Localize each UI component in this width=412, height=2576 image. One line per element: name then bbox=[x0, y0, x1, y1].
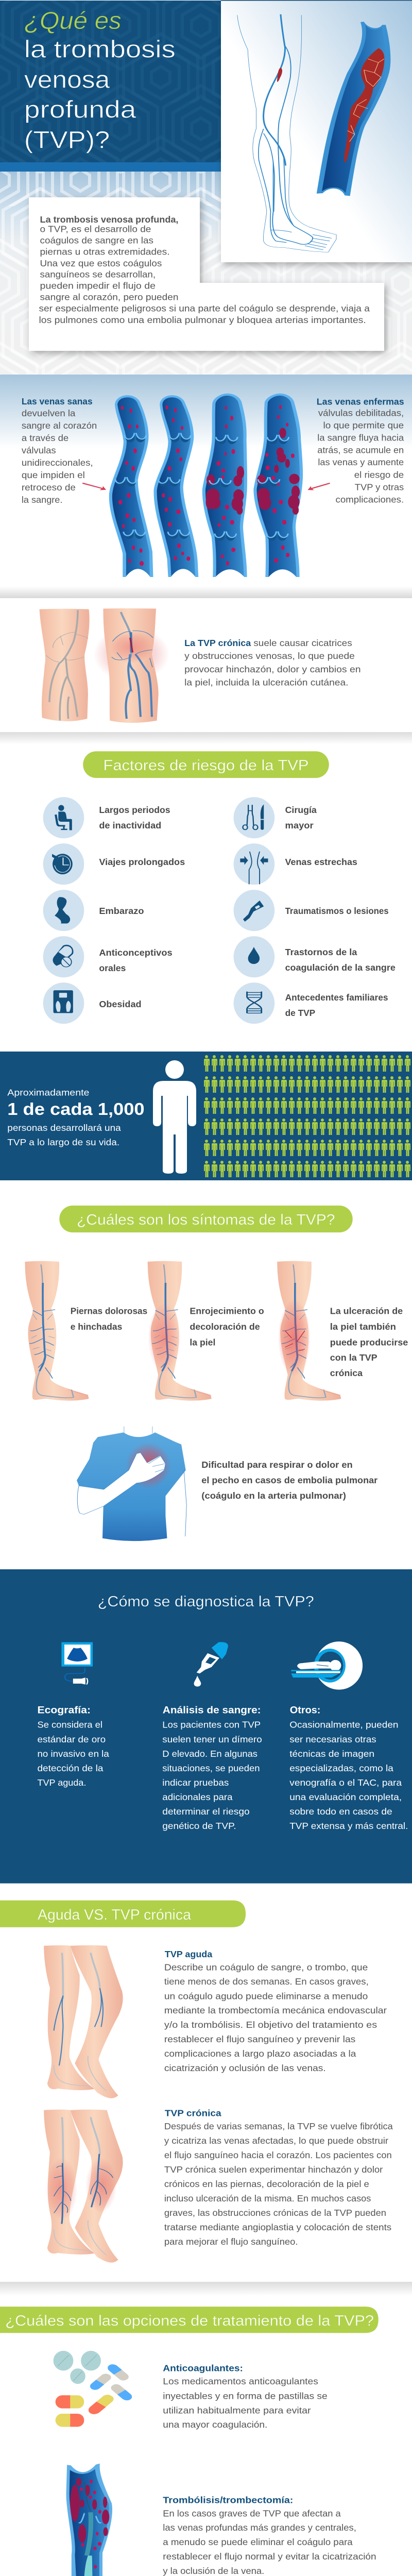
statistic text: TVP a lo largo de su vida. bbox=[7, 1137, 119, 1147]
illustration: person holding chest bbox=[77, 1427, 186, 1541]
risk: narrow veins: Venas estrechas bbox=[285, 857, 357, 867]
panel: chest pain bbox=[77, 1427, 378, 1541]
risk: inactivity: de inactividad bbox=[99, 820, 161, 831]
text: blood test: Análisis de sangre: bbox=[163, 1705, 261, 1716]
text: other imaging: Otros: bbox=[290, 1705, 320, 1716]
text: ultrasound bbox=[37, 1705, 109, 1788]
text: healthy veins bbox=[22, 396, 97, 505]
text: ultrasound: Ecografía: bbox=[37, 1705, 91, 1716]
intro paragraph: coágulos de sangre en las bbox=[40, 235, 153, 246]
text: anticoagulants: una mayor coagulación. bbox=[163, 2419, 267, 2430]
text: ultrasound: no invasivo en la bbox=[37, 1749, 109, 1759]
diseased vein 2 bbox=[253, 394, 303, 577]
text: chronic DVT detail: TVP crónica bbox=[165, 2108, 221, 2119]
treatment divider bbox=[0, 2282, 412, 2296]
text: healthy veins: válvulas bbox=[22, 445, 56, 455]
illustration: knee with chronic DVT bbox=[93, 608, 169, 723]
icon: ultrasound bbox=[61, 1642, 93, 1685]
intro paragraph bbox=[39, 214, 370, 325]
text: healthy veins: devuelven la bbox=[22, 408, 76, 418]
leg line drawing bbox=[237, 14, 336, 252]
risk: surgery: mayor bbox=[285, 820, 314, 831]
risk: inactivity: Largos periodos bbox=[99, 805, 170, 815]
text: healthy veins: a través de bbox=[22, 433, 68, 443]
risk: oral contraceptives: orales bbox=[99, 963, 126, 973]
leg 1: painful swollen: Piernas dolorosas bbox=[71, 1306, 147, 1316]
hero background pattern bbox=[0, 172, 412, 375]
text: blood test bbox=[162, 1705, 262, 1831]
pictogram: crowd of people bbox=[203, 1055, 412, 1180]
risk: clotting disorders bbox=[234, 936, 396, 977]
panel: treatment options bbox=[0, 2307, 379, 2576]
diagnosis content bbox=[37, 1594, 408, 1831]
text: anticoagulants bbox=[163, 2363, 328, 2430]
arrow: to diseased vein bbox=[307, 483, 330, 490]
text: blood test: suelen tener un dímero bbox=[162, 1734, 262, 1744]
text: blood test: determinar el riesgo bbox=[162, 1806, 250, 1817]
heading: diagnosis: ¿Cómo se diagnostica la TVP? bbox=[98, 1594, 314, 1609]
intro paragraph: Una vez que estos coágulos bbox=[40, 258, 162, 268]
risk: clotting disorders: Trastornos de la bbox=[285, 947, 357, 957]
heading: risk factors: Factores de riesgo de la TVP bbox=[104, 757, 308, 773]
text: blood test: D elevado. En algunas bbox=[162, 1749, 258, 1759]
header panel bbox=[0, 1, 221, 172]
leg 2: redness: la piel bbox=[190, 1337, 215, 1347]
leg 2: redness: decoloración de bbox=[190, 1321, 260, 1332]
intro paragraph: La trombosis venosa profunda, bbox=[40, 214, 178, 225]
text: anticoagulants: Anticoagulantes: bbox=[163, 2363, 243, 2374]
text: blood test: Los pacientes con TVP bbox=[162, 1719, 261, 1730]
text: other imaging: ser necesarias otras bbox=[289, 1734, 376, 1744]
text: chest pain: Dificultad para respirar o dolor en bbox=[201, 1460, 353, 1470]
text: anticoagulants: utilizan habitualmente para evitar bbox=[163, 2405, 311, 2415]
leg 1: painful swollen bbox=[25, 1261, 147, 1401]
text: healthy veins: Las venas sanas bbox=[22, 396, 93, 406]
risk: oral contraceptives: Anticonceptivos bbox=[99, 947, 173, 958]
risk: family history bbox=[234, 982, 388, 1024]
title: (TVP)? bbox=[24, 126, 110, 154]
title: la trombosis bbox=[24, 36, 176, 63]
text: blood test: genético de TVP. bbox=[162, 1821, 236, 1831]
text: healthy veins: retroceso de bbox=[22, 482, 76, 493]
text: healthy veins: la sangre. bbox=[22, 495, 62, 505]
leg 3: ulceration: crónica bbox=[330, 1368, 363, 1378]
text: other imaging bbox=[289, 1705, 408, 1831]
text: chronic DVT: La TVP crónica bbox=[184, 638, 251, 648]
illustration: legs with chronic DVT bbox=[44, 2110, 123, 2263]
text: other imaging: técnicas de imagen bbox=[289, 1749, 374, 1759]
text: chest pain bbox=[201, 1460, 378, 1501]
text: blood test: adicionales para bbox=[162, 1792, 233, 1802]
illustration: legs with acute DVT bbox=[44, 1945, 123, 2098]
risk: oral contraceptives bbox=[43, 936, 173, 977]
text: thrombolysis bbox=[163, 2495, 376, 2576]
healthy vein 1 bbox=[109, 395, 153, 577]
text: chronic DVT bbox=[184, 638, 361, 688]
leg 3: ulceration: con la TVP bbox=[330, 1352, 377, 1363]
illustration: catheter in vein bbox=[66, 2464, 112, 2576]
leg 3: ulceration bbox=[277, 1261, 408, 1401]
heading: acute vs chronic bbox=[0, 1901, 246, 1927]
risk: obesity bbox=[43, 982, 141, 1024]
panel: symptoms bbox=[25, 1206, 408, 1401]
enlarged vein with clot bbox=[317, 22, 390, 196]
text: chronic DVT detail: para mejorar el flujo sanguíneo. bbox=[164, 2236, 298, 2247]
heading: symptoms bbox=[59, 1206, 353, 1232]
text: chest pain: (coágulo en la arteria pulmonar) bbox=[201, 1490, 346, 1501]
illustration panel: leg and clotted vein bbox=[221, 0, 412, 262]
risk: trauma bbox=[234, 890, 389, 931]
healthy vs diseased veins background bbox=[0, 375, 412, 448]
risk: surgery bbox=[234, 797, 317, 838]
risk: surgery: Cirugía bbox=[285, 805, 317, 815]
panel: chronic DVT knees bbox=[40, 608, 361, 885]
text: acute DVT: cicatrización y oclusión de las venas. bbox=[164, 2063, 326, 2073]
panel: risk factors remaining rows bbox=[43, 890, 396, 1024]
text: acute DVT: restablecer el flujo sanguíneo y prevenir las bbox=[164, 2034, 355, 2044]
text: chronic DVT: y obstrucciones venosas, lo que puede bbox=[184, 651, 355, 661]
intro paragraph: o TVP, es el desarrollo de bbox=[40, 224, 151, 234]
text: thrombolysis: Trombólisis/trombectomía: bbox=[163, 2495, 293, 2505]
risk: long trips bbox=[43, 843, 185, 885]
icon: CT scanner bbox=[291, 1641, 363, 1690]
text: anticoagulants: Los medicamentos anticoagulantes bbox=[163, 2376, 318, 2386]
panel: diagnosis bbox=[0, 1569, 412, 1884]
text: anticoagulants: inyectables y en forma de pastillas se bbox=[163, 2391, 328, 2401]
diseased vein 1 bbox=[202, 394, 247, 577]
text: acute DVT: TVP aguda bbox=[165, 1949, 213, 1959]
text: chronic DVT: provocar hinchazón, dolor y cambios en bbox=[184, 664, 361, 674]
icon: pills bbox=[54, 2351, 134, 2427]
text: blood test: situaciones, se pueden bbox=[162, 1763, 260, 1773]
text: diseased veins bbox=[317, 396, 404, 504]
healthy vein 2 bbox=[153, 395, 198, 577]
text: chronic DVT: suele causar cicatrices bbox=[253, 638, 352, 648]
statistic text: personas desarrollará una bbox=[7, 1123, 121, 1133]
statistic text bbox=[7, 1087, 145, 1147]
text: acute DVT bbox=[164, 1949, 387, 2073]
title bbox=[24, 7, 176, 154]
text: thrombolysis: En los casos graves de TVP que afectan a bbox=[163, 2508, 341, 2518]
intro paragraph: sanguíneos se desarrollan, bbox=[40, 269, 156, 280]
text: healthy veins: que impiden el bbox=[22, 470, 85, 480]
risk: pregnancy bbox=[43, 890, 144, 931]
heading: treatment bbox=[0, 2307, 379, 2333]
leg 2: redness: Enrojecimiento o bbox=[190, 1306, 264, 1316]
title: profunda bbox=[24, 96, 136, 123]
title: ¿Qué es bbox=[24, 7, 122, 35]
title: venosa bbox=[24, 66, 110, 93]
text: healthy veins: unidireccionales, bbox=[22, 457, 93, 468]
text: ultrasound: estándar de oro bbox=[37, 1734, 106, 1744]
intro text card bbox=[29, 197, 384, 351]
text: ultrasound: TVP aguda. bbox=[37, 1777, 86, 1788]
illustration: healthy knee bbox=[40, 609, 90, 721]
statistic text: Aproximadamente bbox=[7, 1087, 89, 1097]
text: ultrasound: detección de la bbox=[37, 1763, 104, 1773]
text: healthy veins: sangre al corazón bbox=[22, 420, 97, 431]
risk: long trips: Viajes prolongados bbox=[99, 857, 185, 867]
text: thrombolysis: y la oclusión de la vena. bbox=[163, 2566, 264, 2576]
text: chronic DVT detail bbox=[164, 2108, 393, 2247]
risk: pregnancy: Embarazo bbox=[99, 906, 144, 916]
risk: obesity: Obesidad bbox=[99, 999, 141, 1009]
risk: inactivity bbox=[43, 797, 170, 838]
text: ultrasound: Se considera el bbox=[37, 1719, 102, 1730]
leg 2: redness bbox=[148, 1261, 264, 1401]
intro paragraph: piernas u otras extremidades. bbox=[40, 246, 170, 257]
text: blood test: indicar pruebas bbox=[162, 1777, 229, 1788]
icon: dropper bbox=[194, 1642, 228, 1687]
panel: acute vs chronic bbox=[0, 1901, 393, 2263]
intro paragraph: pueden impedir el flujo de bbox=[40, 280, 156, 291]
pictogram: large person bbox=[153, 1060, 196, 1174]
intro paragraph: sangre al corazón, pero pueden bbox=[40, 292, 178, 302]
risk: narrow veins bbox=[234, 843, 357, 885]
risk: family history: de TVP bbox=[285, 1008, 315, 1018]
leg 1: painful swollen: e hinchadas bbox=[71, 1321, 122, 1332]
panel: 1 in 1000 statistic bbox=[0, 1052, 412, 1180]
statistic text: 1 de cada 1,000 bbox=[7, 1099, 145, 1118]
heading: acute vs chronic: Aguda VS. TVP crónica bbox=[38, 1907, 191, 1923]
text: chronic DVT: la piel, incluida la ulceración cutánea. bbox=[184, 677, 349, 688]
chronic DVT band shadows bbox=[0, 586, 412, 744]
heading: risk factors bbox=[83, 751, 329, 778]
arrow: to healthy vein bbox=[82, 483, 106, 490]
panel: healthy and diseased veins bbox=[22, 394, 404, 577]
